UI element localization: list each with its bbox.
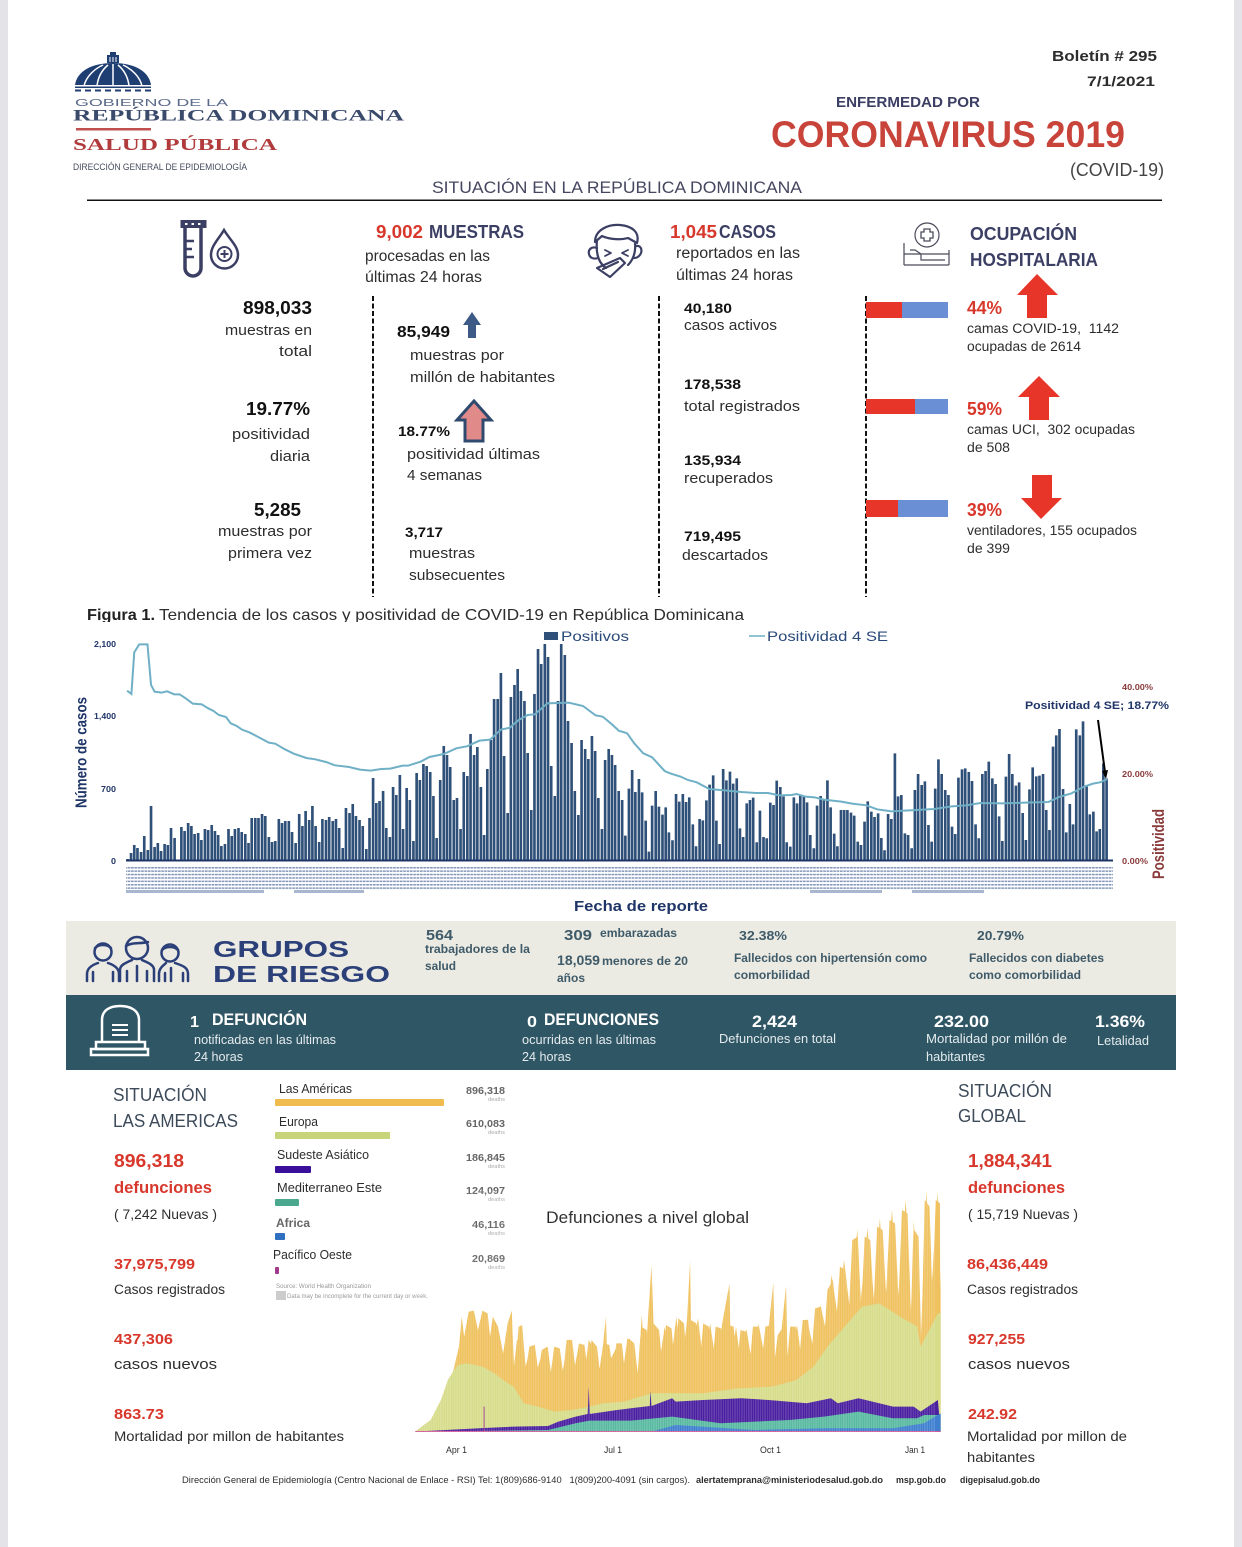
panel: casos: 135,934 (684, 452, 741, 468)
heading: DE RIESGO (213, 961, 390, 987)
risk stats: menores de 20 (602, 954, 688, 968)
time axis labels: Oct 1 (760, 1445, 781, 1455)
footer: msp.gob.do (896, 1475, 946, 1486)
panel: muestras totals: muestras por (218, 523, 312, 540)
panel: situacion las americas: 37,975,799 (114, 1256, 195, 1273)
panel: situacion global: Casos registrados (967, 1282, 1078, 1297)
risk stats: 32.38% (739, 928, 787, 943)
risk stats: embarazadas (600, 926, 677, 940)
icon: hospital bed (904, 223, 949, 265)
risk stats: años (557, 971, 585, 985)
right axis: 40.00% (1122, 683, 1153, 692)
chart: defunciones por region (273, 1082, 505, 1300)
heading: muestras: MUESTRAS (429, 222, 524, 242)
panel: defunciones: 1.36% (1095, 1013, 1145, 1031)
chart: defunciones por region: deaths (488, 1197, 505, 1203)
panel: casos (682, 300, 800, 564)
title: (COVID-19) (1070, 160, 1164, 180)
panel: muestras totals (218, 297, 312, 562)
panel: defunciones: 2,424 (752, 1013, 798, 1031)
panel: ocupacion hospitalaria: 59% (967, 399, 1002, 419)
panel: situacion global: 927,255 (968, 1331, 1025, 1348)
icon: face with mask (589, 225, 641, 277)
chart: defunciones por region: 186,845 (466, 1152, 505, 1164)
bar: camas uci 59% (866, 399, 948, 414)
icon: test tube and drop (181, 220, 238, 276)
panel: defunciones: Letalidad (1097, 1034, 1149, 1048)
panel: situacion global: casos nuevos (968, 1356, 1070, 1373)
x axis title: Fecha de reporte (574, 898, 708, 915)
title: ENFERMEDAD POR (836, 94, 980, 111)
left axis: 1,400 (94, 711, 116, 721)
chart: defunciones por region: Source: World Health Organization (276, 1284, 371, 1290)
risk stats: 564 (426, 927, 454, 944)
panel: muestras totals: diaria (270, 448, 311, 465)
risk stats: 309 (564, 927, 592, 944)
heading: ocupacion hospitalaria: HOSPITALARIA (970, 249, 1098, 270)
bulletin number and date (1052, 48, 1157, 89)
bars (128, 644, 1107, 860)
panel: defunciones: ocurridas en las últimas (522, 1033, 656, 1047)
column dividers (373, 296, 866, 597)
panel: muestras indicators: 3,717 (405, 524, 443, 540)
title: CORONAVIRUS 2019 (771, 114, 1125, 155)
panel: defunciones: habitantes (926, 1050, 985, 1064)
panel: situacion las americas: SITUACIÓN (113, 1084, 207, 1105)
chart: defunciones a nivel global: Defunciones a nivel global (546, 1209, 749, 1227)
left axis: 700 (101, 784, 116, 794)
left axis: Número de casos (74, 697, 90, 808)
heading: muestras (365, 222, 524, 286)
panel: defunciones: 0 (527, 1014, 537, 1031)
panel: ocupacion hospitalaria: ventiladores, 155 ocupados (967, 523, 1137, 538)
panel: ocupacion hospitalaria (866, 274, 1137, 556)
panel: casos: 178,538 (684, 376, 741, 392)
positivity line (127, 644, 1107, 811)
panel: defunciones: notificadas en las últimas (194, 1033, 336, 1047)
panel: muestras indicators: 18.77% (398, 423, 451, 439)
heading (213, 936, 390, 987)
risk stats: Fallecidos con hipertensión como (734, 951, 927, 965)
chart: defunciones por region: Europa (279, 1115, 318, 1129)
footer: alertatemprana@ministeriodesalud.gob.do (696, 1475, 883, 1486)
panel: defunciones: 1 (190, 1014, 199, 1031)
callout: positividad 18.77% (1025, 700, 1169, 779)
bulletin number and date: 7/1/2021 (1087, 73, 1155, 89)
panel: muestras indicators (397, 312, 555, 584)
panel: situacion global: GLOBAL (958, 1105, 1026, 1126)
arrow: up (1018, 376, 1060, 420)
chart: defunciones por region: Las Américas (279, 1082, 352, 1096)
right axis: 20.00% (1122, 770, 1153, 779)
chart legend: Positivos (561, 628, 629, 644)
panel: situacion global: defunciones (968, 1178, 1065, 1197)
panel: situacion las americas: defunciones (114, 1178, 212, 1197)
right axis: 0.00% (1122, 857, 1148, 866)
left axis: 0 (111, 856, 116, 866)
panel: ocupacion hospitalaria: camas COVID-19, 1142 (967, 321, 1119, 336)
panel: situacion las americas: Mortalidad por millon de habitantes (114, 1429, 344, 1444)
panel: muestras totals: 5,285 (254, 499, 301, 520)
x axis baseline (126, 860, 1113, 862)
footer: Dirección General de Epidemiología (Centro Nacional de Enlace - RSI) Tel: 1(809)686-9140 1(809)200-4091 (sin cargos). (182, 1475, 690, 1486)
panel: defunciones: Defunciones en total (719, 1032, 836, 1046)
panel: situacion las americas: 863.73 (114, 1406, 164, 1423)
panel: defunciones (66, 995, 1176, 1070)
panel: situacion global: ( 15,719 Nuevas ) (968, 1207, 1078, 1222)
chart: defunciones por region: Sudeste Asiático (277, 1148, 369, 1162)
heading: GRUPOS (213, 936, 349, 962)
panel: situacion las americas: casos nuevos (114, 1356, 217, 1373)
logo: Gobierno de la República Dominicana: GOBIERNO DE LA (75, 97, 228, 109)
arrow: down (1021, 475, 1062, 519)
figure heading: Figura 1. (87, 607, 155, 624)
panel: situacion global: habitantes (967, 1450, 1035, 1465)
panel: defunciones: DEFUNCIÓN (212, 1010, 307, 1029)
risk stats: salud (425, 959, 456, 973)
risk stats (425, 926, 1104, 985)
chart: defunciones por region: Data may be incomplete for the current day or week. (287, 1294, 428, 1300)
panel: situacion global: 1,884,341 (968, 1151, 1052, 1171)
x axis date labels band (126, 866, 1113, 893)
panel: situacion las americas: 896,318 (114, 1151, 184, 1171)
panel: ocupacion hospitalaria: ocupadas de 2614 (967, 339, 1081, 354)
figure heading: Tendencia de los casos y positividad de COVID-19 en República Dominicana (159, 607, 744, 624)
footer: digepisalud.gob.do (960, 1475, 1040, 1486)
chart: defunciones por region: deaths (488, 1231, 505, 1237)
time axis labels (446, 1445, 925, 1455)
risk stats: trabajadores de la (425, 942, 530, 956)
chart: defunciones por region: 124,097 (466, 1185, 505, 1197)
icon: dome (75, 52, 151, 90)
heading: muestras: últimas 24 horas (365, 269, 482, 286)
heading: muestras: 9,002 (376, 222, 423, 242)
chart: defunciones por region: deaths (488, 1265, 505, 1271)
icon: pink up arrow (457, 401, 491, 441)
left axis (74, 639, 116, 866)
left axis: 2,100 (94, 639, 116, 649)
panel: ocupacion hospitalaria: camas UCI, 302 ocupadas (967, 422, 1135, 437)
risk stats: Fallecidos con diabetes (969, 951, 1104, 965)
time axis labels: Jul 1 (604, 1445, 622, 1455)
subtitle: SITUACIÓN EN LA REPÚBLICA DOMINICANA (432, 178, 803, 197)
chart: defunciones por region: Africa (276, 1216, 310, 1230)
panel: situacion global: SITUACIÓN (958, 1080, 1052, 1101)
bulletin number and date: Boletín # 295 (1052, 48, 1157, 65)
logo: Gobierno de la República Dominicana (73, 52, 405, 172)
bar: camas covid 44% (866, 302, 948, 318)
callout: positividad 18.77%: Positividad 4 SE; 18.77% (1025, 700, 1169, 712)
chart: defunciones por region: Mediterraneo Este (277, 1181, 382, 1195)
time axis labels: Jan 1 (905, 1445, 925, 1455)
panel: situacion las americas: LAS AMERICAS (113, 1110, 238, 1131)
panel: muestras totals: muestras en (225, 322, 312, 339)
panel: situacion las americas: ( 7,242 Nuevas ) (114, 1207, 217, 1222)
panel: ocupacion hospitalaria: 44% (967, 298, 1002, 318)
panel: situacion las americas (113, 1084, 344, 1444)
panel: casos: descartados (682, 547, 768, 564)
stacked series (415, 1190, 941, 1432)
logo: Gobierno de la República Dominicana: SALUD PÚBLICA (73, 135, 278, 154)
arrow: up (1017, 274, 1058, 318)
chart: defunciones por region: deaths (488, 1164, 505, 1170)
title (771, 94, 1164, 180)
panel: muestras indicators: millón de habitantes (410, 369, 555, 386)
panel: defunciones: Mortalidad por millón de (926, 1032, 1067, 1046)
panel: defunciones: 232.00 (934, 1013, 989, 1031)
chart: defunciones a nivel global (415, 1190, 941, 1455)
panel: ocupacion hospitalaria: 39% (967, 500, 1002, 520)
panel: muestras indicators: muestras (409, 545, 475, 562)
chart legend (544, 628, 888, 644)
chart: defunciones por region: 20,869 (472, 1253, 505, 1265)
risk stats: 20.79% (977, 928, 1024, 943)
footer (182, 1475, 1040, 1486)
icon: tombstone (91, 1006, 148, 1055)
panel: grupos de riesgo (66, 921, 1176, 995)
right axis: Positividad (1149, 809, 1168, 879)
panel: muestras indicators: positividad últimas (407, 446, 540, 463)
panel: defunciones: DEFUNCIONES (544, 1011, 659, 1029)
logo: Gobierno de la República Dominicana: DIRECCIÓN GENERAL DE EPIDEMIOLOGÍA (73, 162, 247, 172)
time axis labels: Apr 1 (446, 1445, 467, 1455)
panel: muestras indicators: 4 semanas (407, 467, 482, 484)
heading: muestras: procesadas en las (365, 248, 490, 265)
heading: ocupacion hospitalaria (970, 223, 1098, 270)
panel: ocupacion hospitalaria: de 399 (967, 541, 1010, 556)
panel: situacion global: 242.92 (968, 1406, 1017, 1423)
panel: casos: total registrados (684, 398, 800, 415)
risk stats: como comorbilidad (969, 968, 1081, 982)
panel: muestras totals: 898,033 (243, 297, 312, 318)
heading: casos: CASOS (719, 222, 776, 242)
panel: muestras indicators: 85,949 (397, 324, 450, 341)
right axis (1122, 683, 1168, 879)
panel: defunciones: 24 horas (194, 1050, 243, 1064)
panel: muestras indicators: muestras por (410, 347, 504, 364)
panel: muestras totals: total (279, 343, 312, 360)
heading: casos: reportados en las (676, 245, 800, 262)
panel: muestras totals: positividad (232, 426, 310, 443)
chart: defunciones por region: 896,318 (466, 1085, 505, 1097)
chart: positivos y positividad (74, 628, 1169, 915)
panel: muestras totals: 19.77% (246, 398, 310, 419)
chart: defunciones por region: deaths (488, 1097, 505, 1103)
panel: situacion global: Mortalidad por millon de (967, 1429, 1127, 1444)
panel: casos: casos activos (684, 317, 777, 334)
chart: defunciones por region: 46,116 (472, 1219, 505, 1231)
icon: blue up arrow (463, 312, 481, 338)
chart: defunciones por region: deaths (488, 1130, 505, 1136)
heading: casos (670, 222, 800, 284)
bar: ventiladores 39% (866, 500, 948, 517)
panel: situacion global: 86,436,449 (967, 1256, 1048, 1273)
icon: people (87, 937, 188, 981)
logo: Gobierno de la República Dominicana: REPÚBLICA DOMINICANA (73, 106, 405, 124)
panel: muestras totals: primera vez (228, 545, 312, 562)
panel: muestras indicators: subsecuentes (409, 567, 505, 584)
panel: situacion global (958, 1080, 1127, 1465)
panel: situacion las americas: 437,306 (114, 1331, 173, 1348)
panel: casos: recuperados (684, 470, 773, 487)
chart: defunciones por region: 610,083 (466, 1118, 505, 1130)
panel: defunciones: 24 horas (522, 1050, 571, 1064)
panel: ocupacion hospitalaria: de 508 (967, 440, 1010, 455)
heading: ocupacion hospitalaria: OCUPACIÓN (970, 223, 1077, 244)
risk stats: comorbilidad (734, 968, 810, 982)
panel: casos: 40,180 (684, 300, 732, 316)
heading: casos: últimas 24 horas (676, 267, 793, 284)
chart legend: Positividad 4 SE (767, 628, 888, 644)
risk stats: 18,059 (557, 953, 600, 968)
panel: casos: 719,495 (684, 528, 741, 544)
chart: defunciones por region: Pacífico Oeste (273, 1248, 352, 1262)
panel: situacion las americas: Casos registrados (114, 1282, 225, 1297)
heading: casos: 1,045 (670, 222, 717, 242)
